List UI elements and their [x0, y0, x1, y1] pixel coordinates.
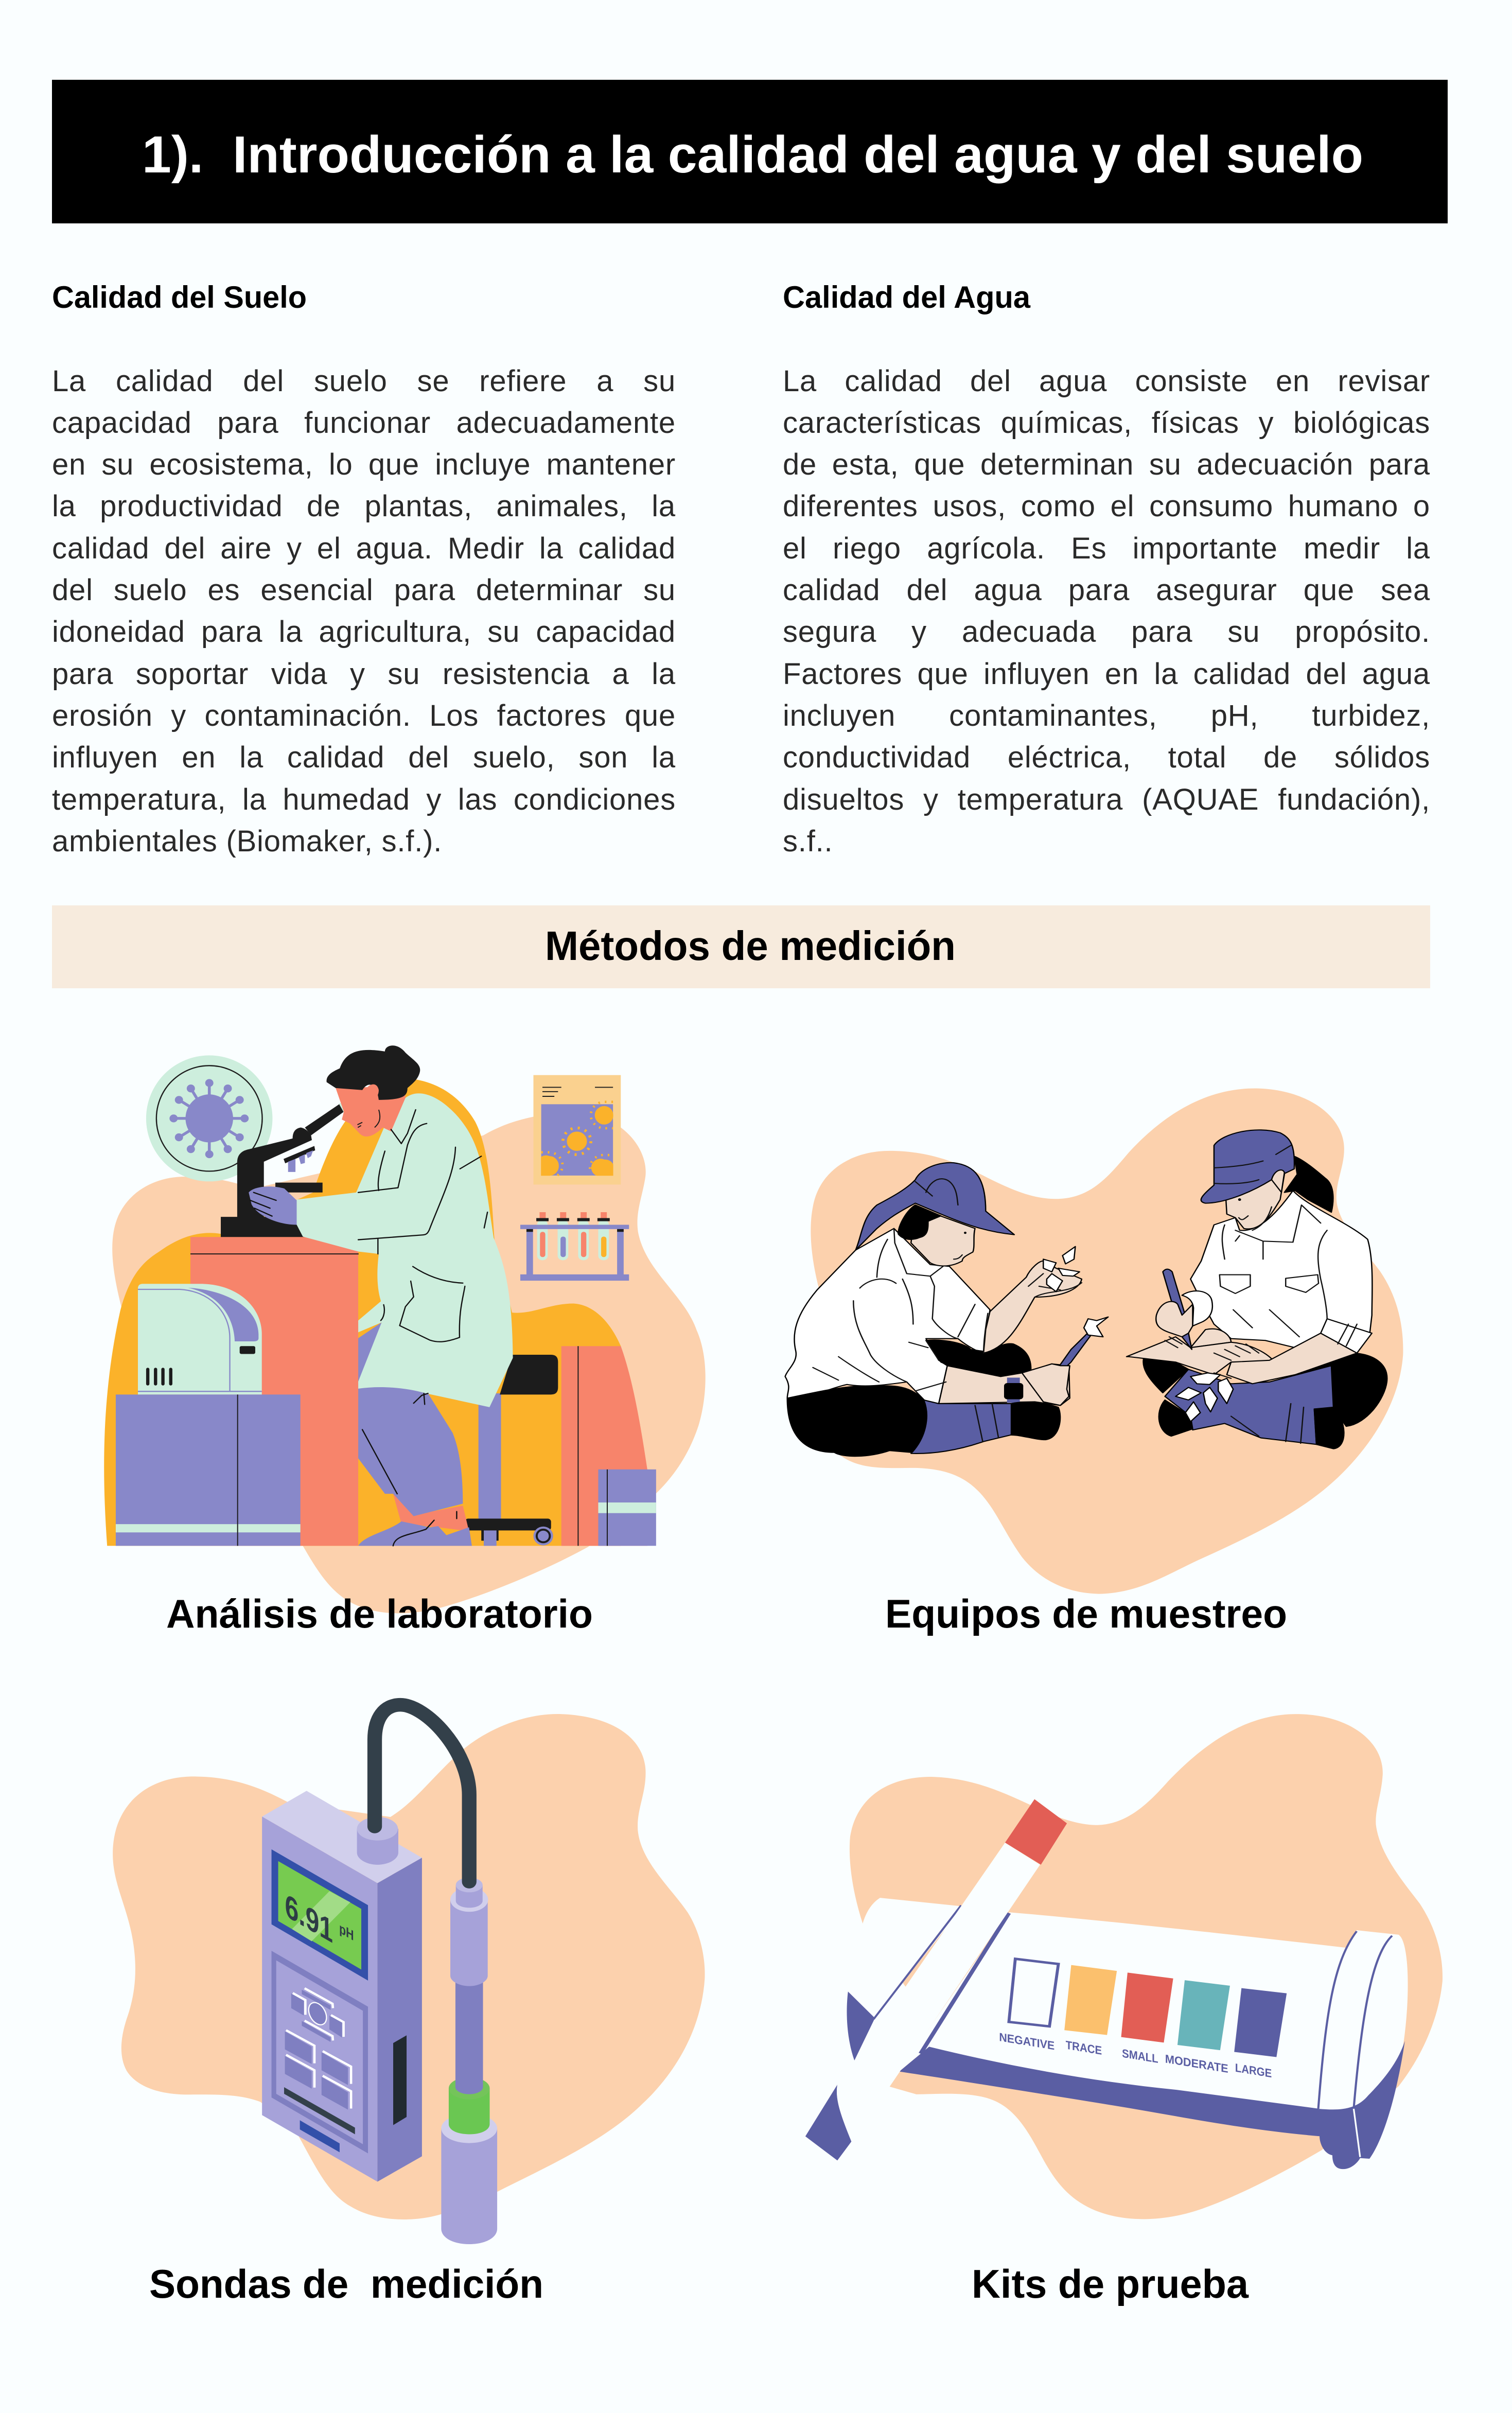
- books: [561, 1346, 656, 1546]
- section banner: measurement methods: Métodos de medición: [545, 923, 956, 969]
- blob background: [112, 1116, 706, 1613]
- text block: soil quality: idoneidad para la agricultura, su capacidad: [52, 615, 676, 649]
- text block: water quality: de esta, que determinan su adecuación para: [783, 448, 1430, 481]
- colour swatches: [1009, 1959, 1287, 2057]
- roll end cap: [1318, 1930, 1408, 2169]
- blob background: [850, 1714, 1443, 2219]
- right researcher: [1127, 1130, 1387, 1449]
- swatch labels: [999, 2031, 1272, 2080]
- text block: soil quality: [52, 364, 676, 858]
- text block: water quality: disueltos y temperatura (AQUAE fundación),: [783, 783, 1430, 816]
- text block: water quality: incluyen contaminantes, pH, turbidez,: [783, 699, 1430, 732]
- probe handle: [441, 1878, 497, 2244]
- text block: soil quality: ambientales (Biomaker, s.f.).: [52, 825, 442, 858]
- label: laboratory analysis: Análisis de laboratorio: [166, 1591, 593, 1636]
- text block: soil quality: calidad del aire y el agua. Medir la calidad: [52, 532, 676, 565]
- stool: [465, 1355, 558, 1546]
- text block: water quality: diferentes usos, como el consumo humano o: [783, 489, 1430, 523]
- reading: pH value: pH: [339, 1920, 354, 1944]
- panel: laboratory analysis: [104, 1045, 706, 1613]
- swatch labels: TRACE: [1066, 2039, 1102, 2057]
- text block: water quality: [783, 364, 1430, 858]
- text block: water quality: el riego agrícola. Es importante medir la: [783, 532, 1430, 565]
- blob background: [113, 1714, 705, 2219]
- label: measurement probes: Sondas de medición: [149, 2261, 543, 2306]
- lab instrument: [138, 1284, 262, 1394]
- test tube rack: [520, 1212, 629, 1281]
- poster with viruses: [533, 1075, 621, 1184]
- text block: soil quality: del suelo es esencial para determinar su: [52, 573, 676, 607]
- paper roll chart: [805, 1898, 1356, 2160]
- cable connector: [357, 1817, 398, 1865]
- title banner: [52, 80, 1448, 223]
- text block: soil quality: La calidad del suelo se refiere a su: [52, 364, 676, 398]
- heading: soil quality: Calidad del Suelo: [52, 280, 307, 314]
- heading: water quality: Calidad del Agua: [783, 280, 1031, 314]
- text block: water quality: conductividad eléctrica, total de sólidos: [783, 741, 1430, 774]
- test strip: [837, 1799, 1067, 2142]
- swatch labels: NEGATIVE: [999, 2031, 1054, 2053]
- text block: soil quality: capacidad para funcionar adecuadamente: [52, 406, 676, 440]
- text block: water quality: La calidad del agua consiste en revisar: [783, 364, 1430, 398]
- text block: soil quality: temperatura, la humedad y las condiciones: [52, 783, 676, 816]
- coral desk: [190, 1237, 359, 1546]
- text block: soil quality: erosión y contaminación. Los factores que: [52, 699, 676, 732]
- text block: soil quality: la productividad de plantas, animales, la: [52, 489, 676, 523]
- text block: soil quality: influyen en la calidad del suelo, son la: [52, 741, 676, 774]
- reading: pH value: 6.91: [285, 1886, 333, 1950]
- title banner: 1). Introducción a la calidad del agua y del suelo: [142, 126, 1363, 184]
- panel: sampling team: [785, 1089, 1403, 1594]
- swatch labels: MODERATE: [1165, 2053, 1228, 2075]
- icon: virus circle: [146, 1055, 272, 1181]
- section banner: measurement methods: [52, 905, 1430, 988]
- handheld meter: [262, 1791, 422, 2182]
- swatch labels: SMALL: [1122, 2047, 1158, 2066]
- panel: measurement probes: [113, 1705, 705, 2244]
- text block: water quality: calidad del agua para asegurar que sea: [783, 573, 1430, 607]
- swatch labels: LARGE: [1235, 2061, 1272, 2080]
- label: sampling team: Equipos de muestreo: [885, 1591, 1287, 1636]
- text block: water quality: segura y adecuada para su propósito.: [783, 615, 1430, 649]
- orange backdrop: [104, 1078, 621, 1546]
- cable: [375, 1705, 469, 1882]
- text block: soil quality: para soportar vida y su resistencia a la: [52, 657, 676, 691]
- text block: water quality: s.f..: [783, 825, 833, 858]
- text block: water quality: Factores que influyen en la calidad del agua: [783, 657, 1430, 691]
- purple cabinet: [116, 1394, 301, 1546]
- microscope: [221, 1101, 346, 1237]
- scientist: [249, 1045, 513, 1546]
- text block: water quality: características químicas, físicas y biológicas: [783, 406, 1430, 440]
- label: test kits: Kits de prueba: [972, 2261, 1249, 2306]
- blob background: [811, 1089, 1403, 1594]
- panel: test kits: [805, 1714, 1443, 2219]
- text block: soil quality: en su ecosistema, lo que incluye mantener: [52, 448, 676, 481]
- left researcher: [785, 1163, 1108, 1456]
